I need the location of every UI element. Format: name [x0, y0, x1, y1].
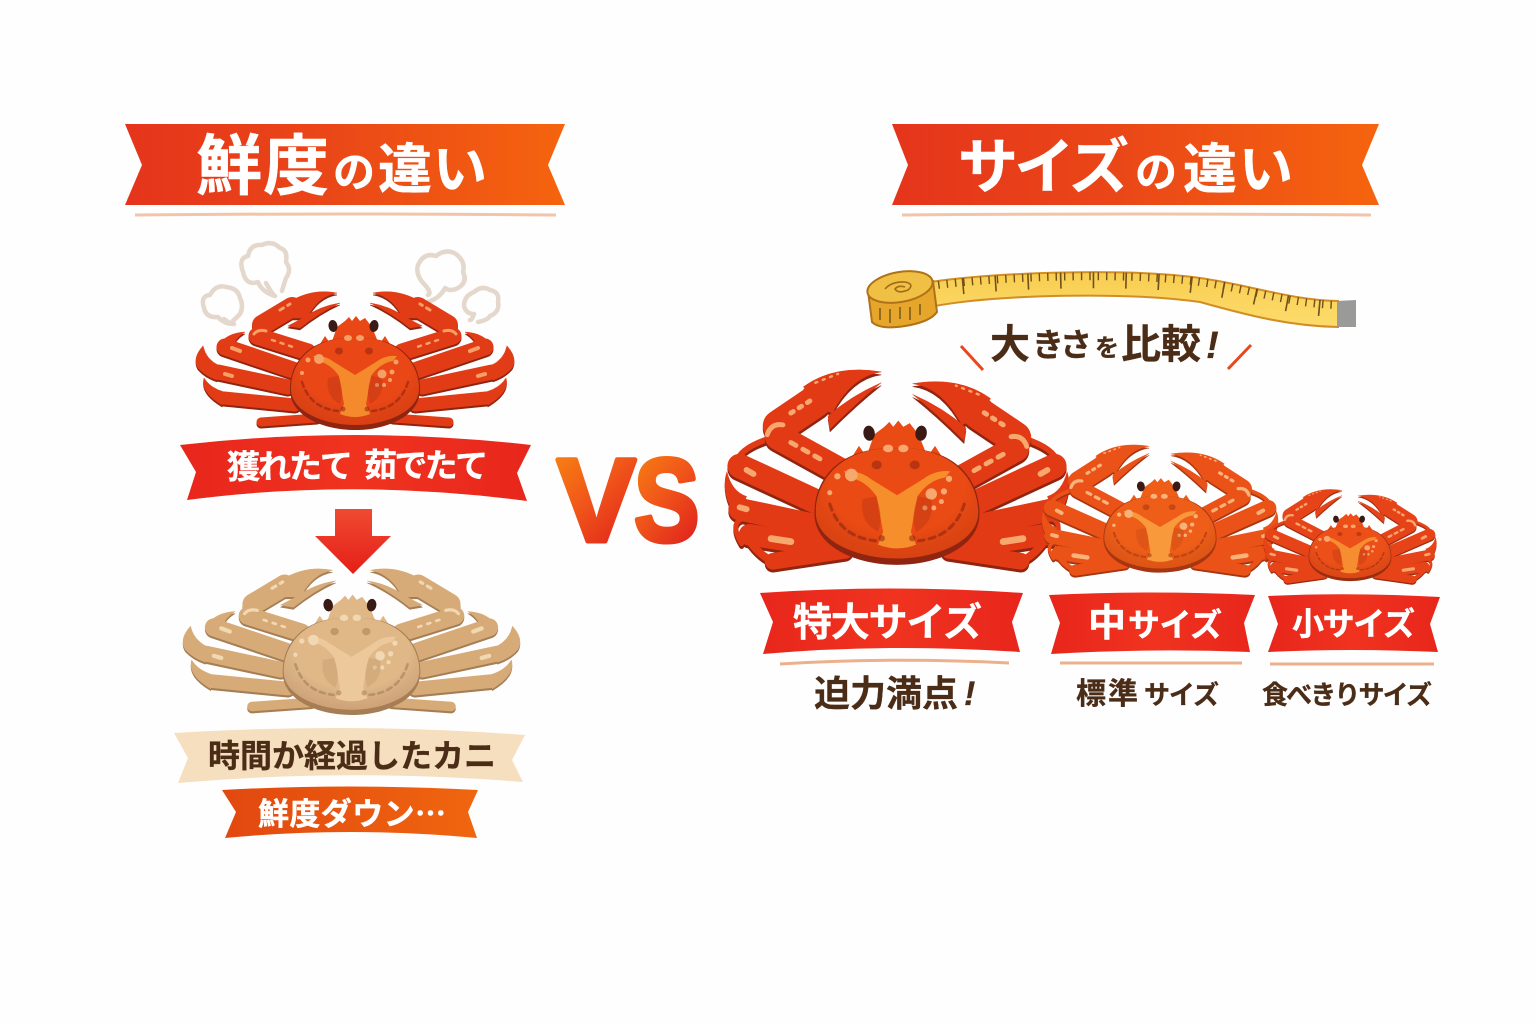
ribbon: freshly caught and boiled: 茹でたて	[364, 446, 488, 485]
ribbon: freshly caught and boiled	[180, 435, 531, 501]
label: medium: 標準	[1076, 678, 1138, 711]
label: small: 小サイズ	[1292, 606, 1415, 642]
panel: size	[725, 124, 1440, 714]
icon: steam clouds	[203, 243, 498, 324]
label: medium: 中	[1088, 603, 1126, 645]
icon: fresh red crab	[196, 292, 514, 430]
heading banner: freshness: の	[333, 149, 375, 196]
heading banner: freshness: 違い	[378, 140, 487, 200]
ribbon: crab that has aged	[174, 728, 525, 783]
panel: freshness	[125, 124, 565, 838]
text: compare sizes: 比較	[1121, 323, 1201, 367]
ribbon: freshness down	[222, 786, 478, 838]
heading banner: freshness: 鮮度	[196, 129, 329, 203]
heading banner: freshness	[125, 124, 565, 215]
VS mark	[557, 434, 699, 567]
icon: aged beige crab	[183, 569, 520, 715]
icon: medium crab	[1042, 445, 1278, 573]
text: compare sizes: きさ	[1032, 327, 1092, 363]
label: medium: サイズ	[1128, 607, 1222, 643]
text: compare sizes: を	[1095, 335, 1119, 362]
ribbon: freshly caught and boiled: 獲れたて	[227, 447, 353, 486]
label: medium	[1049, 592, 1255, 711]
label: extra large: 特大サイズ	[793, 602, 982, 645]
label: extra large: 迫力満点	[814, 673, 958, 714]
ribbon: crab that has aged: 時間か経過したカニ	[208, 738, 496, 774]
heading banner: size: の	[1135, 149, 1177, 196]
label: small	[1262, 594, 1440, 710]
label: extra large: !	[964, 675, 975, 713]
heading banner: size	[892, 124, 1379, 215]
text: compare sizes: !	[1206, 325, 1219, 367]
label: medium: サイズ	[1144, 680, 1219, 710]
heading banner: size: 違い	[1183, 140, 1293, 200]
label: small: 食べきりサイズ	[1262, 680, 1432, 710]
text: compare sizes	[961, 323, 1251, 370]
label: extra large	[760, 588, 1023, 714]
icon: small crab	[1263, 489, 1437, 581]
arrow: down	[315, 509, 391, 574]
text: compare sizes: 大	[990, 323, 1030, 367]
icon: tape measure	[865, 266, 1356, 327]
VS mark: V	[557, 435, 636, 567]
ribbon: freshness down: 鮮度ダウン…	[258, 789, 446, 834]
VS mark: S	[634, 434, 699, 566]
icon: extra large crab	[725, 370, 1069, 565]
heading banner: size: サイズ	[958, 134, 1129, 201]
